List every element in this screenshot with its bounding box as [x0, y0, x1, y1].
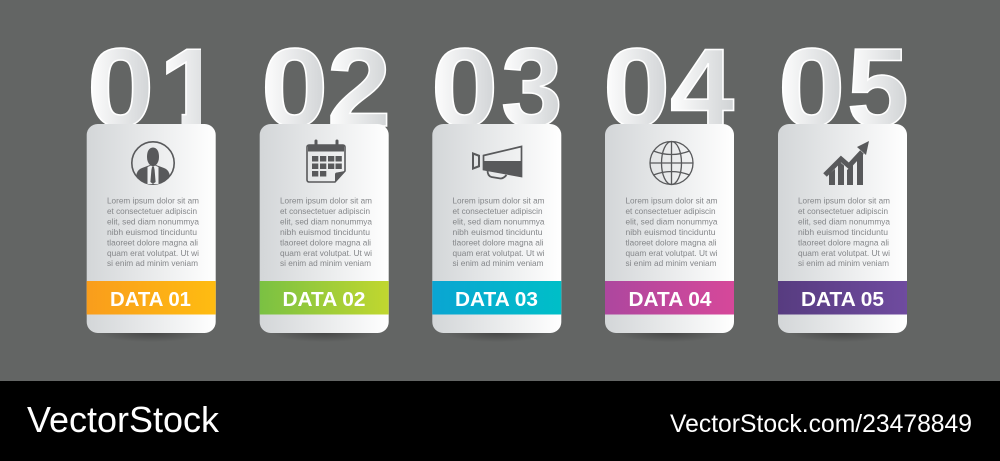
icon: calendar — [307, 140, 345, 182]
label band 03: DATA 03 — [455, 288, 538, 311]
body text 02: quam erat volutpat. Ut wi — [280, 248, 372, 258]
body text 02: elit, sed diam nonummya — [280, 216, 372, 226]
body text 03: Lorem ipsum dolor sit am — [452, 196, 544, 206]
label band 05: DATA 05 — [801, 288, 884, 311]
body text 05: et consectetuer adipiscin — [798, 206, 888, 216]
number 02: 0 — [261, 26, 328, 150]
body text 03: quam erat volutpat. Ut wi — [452, 248, 545, 258]
body text 02: Lorem ipsum dolor sit am — [280, 196, 372, 206]
label band 05 — [778, 281, 907, 314]
number 05 — [778, 26, 909, 150]
icon: businessman — [132, 142, 174, 184]
body text 02: et consectetuer adipiscin — [280, 206, 370, 216]
body text 05: quam erat volutpat. Ut wi — [798, 248, 890, 258]
body text 04: elit, sed diam nonummya — [626, 216, 718, 226]
body text 05: tlaoreet dolore magna ali — [798, 237, 889, 247]
body text 02: si enim ad minim veniam — [280, 258, 371, 268]
number 01 — [90, 47, 201, 124]
panel: step 04 — [603, 25, 734, 342]
body text 01: quam erat volutpat. Ut wi — [107, 248, 199, 258]
label band 04 — [605, 281, 734, 314]
footer brand: VectorStock — [27, 399, 220, 440]
body text 03: si enim ad minim veniam — [452, 258, 544, 268]
label band 04: DATA 04 — [628, 288, 712, 311]
body text 04: si enim ad minim veniam — [626, 258, 716, 268]
number 04: 0 — [603, 26, 670, 150]
number 05: 5 — [847, 26, 909, 150]
number 05: 0 — [778, 26, 845, 150]
card shadow 01 — [99, 324, 203, 342]
panel: step 03 — [431, 26, 563, 342]
panel: step 02 — [260, 25, 391, 342]
body text 04: Lorem ipsum dolor sit am — [626, 196, 718, 206]
icon: megaphone — [472, 146, 522, 178]
number 04: 4 — [670, 25, 734, 150]
footer image id: VectorStock.com/23478849 — [670, 410, 972, 438]
body text 01: Lorem ipsum dolor sit am — [107, 196, 199, 206]
panel: step 05 — [778, 26, 909, 342]
card shadow 02 — [272, 324, 376, 342]
card 03 — [432, 124, 561, 333]
body text 04: quam erat volutpat. Ut wi — [626, 248, 718, 258]
number 03 — [431, 26, 563, 150]
body text 04: nibh euismod tinciduntu — [626, 227, 716, 237]
body text 03: nibh euismod tinciduntu — [452, 227, 543, 237]
number 03: 3 — [501, 26, 563, 150]
label band 01 — [87, 281, 216, 314]
body text 05: si enim ad minim veniam — [798, 258, 889, 268]
body text 01: si enim ad minim veniam — [107, 258, 198, 268]
body text 05: nibh euismod tinciduntu — [798, 227, 888, 237]
card shadow 04 — [617, 324, 721, 342]
body text 01: elit, sed diam nonummya — [107, 216, 199, 226]
card 04 — [605, 124, 734, 333]
number 01: 0 — [87, 26, 154, 150]
number 03: 0 — [431, 26, 498, 150]
body text 02: tlaoreet dolore magna ali — [280, 237, 371, 247]
body text 05: Lorem ipsum dolor sit am — [798, 196, 890, 206]
label band 03 — [432, 281, 561, 314]
number 01: 1 — [159, 25, 223, 150]
card 05 — [778, 124, 907, 333]
icon: growth chart — [825, 141, 869, 185]
body text 01: et consectetuer adipiscin — [107, 206, 197, 216]
card 02 — [260, 124, 389, 333]
body text 01: tlaoreet dolore magna ali — [107, 237, 198, 247]
body text 01: nibh euismod tinciduntu — [107, 227, 197, 237]
number 04 — [603, 25, 734, 150]
card shadow 03 — [445, 324, 549, 342]
card 01 — [87, 124, 216, 333]
body text 05: elit, sed diam nonummya — [798, 216, 890, 226]
panel: step 01 — [86, 47, 216, 340]
body text 03: et consectetuer adipiscin — [452, 206, 543, 216]
number 02 — [261, 25, 391, 150]
number 02: 2 — [327, 25, 391, 150]
label band 02 — [260, 281, 389, 314]
body text 04: et consectetuer adipiscin — [626, 206, 716, 216]
icon: globe — [650, 142, 693, 184]
footer bar — [0, 381, 1000, 461]
body text 03: tlaoreet dolore magna ali — [452, 237, 544, 247]
label band 02: DATA 02 — [282, 288, 366, 311]
body text 04: tlaoreet dolore magna ali — [626, 237, 717, 247]
label band 01: DATA 01 — [110, 288, 191, 311]
body text 03: elit, sed diam nonummya — [452, 216, 545, 226]
body text 02: nibh euismod tinciduntu — [280, 227, 370, 237]
card shadow 05 — [790, 324, 894, 342]
